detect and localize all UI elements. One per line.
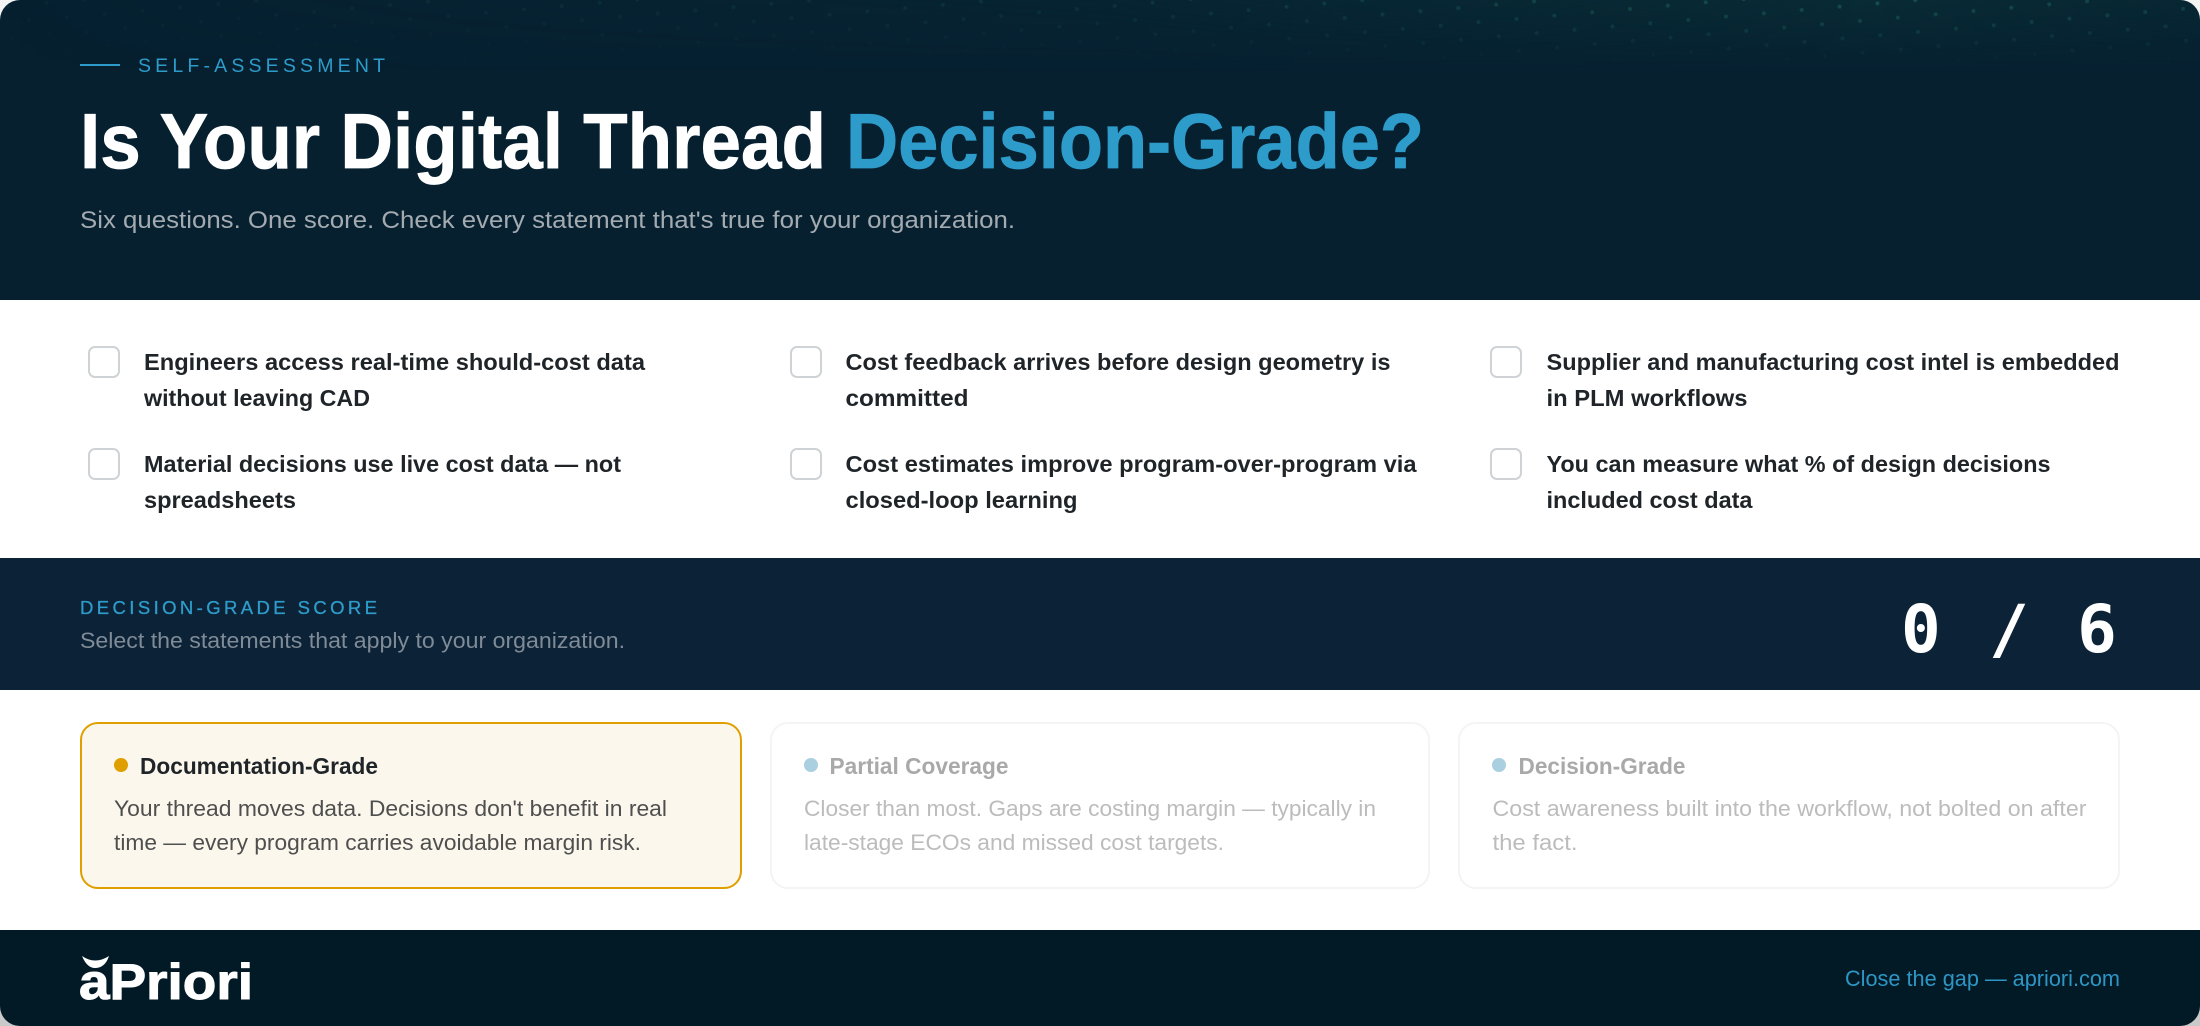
status dot xyxy=(804,758,818,772)
card body: Closer than most. Gaps are costing margin — typically in xyxy=(804,796,1376,821)
checklist item 5 xyxy=(1491,347,2120,411)
card body xyxy=(114,796,667,855)
checklist item 5: in PLM workflows xyxy=(1546,385,1748,411)
card body: the fact. xyxy=(1492,830,1578,855)
card body: time — every program carries avoidable margin risk. xyxy=(114,830,641,855)
checklist item 1: Engineers access real-time should-cost data xyxy=(144,349,645,375)
checklist item 3 xyxy=(791,347,1390,411)
checklist item 4: closed-loop learning xyxy=(846,487,1078,513)
panel: score bar xyxy=(0,558,2200,690)
card body xyxy=(804,796,1376,855)
status dot xyxy=(114,758,128,772)
panel: header xyxy=(0,0,2200,300)
title xyxy=(84,111,1420,185)
checklist item 3: Cost feedback arrives before design geometry is xyxy=(846,349,1390,375)
checklist item 3: committed xyxy=(846,385,968,411)
card: documentation-grade xyxy=(81,723,741,888)
score value: 0 / 6 xyxy=(1901,591,2121,668)
card title: Documentation-Grade xyxy=(140,753,378,779)
checklist item 4 xyxy=(791,449,1417,513)
panel: checklist xyxy=(0,300,2200,558)
panel: footer xyxy=(0,930,2200,1026)
card: decision-grade xyxy=(1459,723,2119,888)
card title: Partial Coverage xyxy=(830,753,1008,779)
checklist item 2: spreadsheets xyxy=(144,487,296,513)
card body: late-stage ECOs and missed cost targets. xyxy=(804,830,1224,855)
logo: aPriori: aPriori xyxy=(79,954,253,1010)
checklist item 2 xyxy=(89,449,621,513)
score label: DECISION-GRADE SCORE xyxy=(80,597,377,618)
checklist item 2: Material decisions use live cost data — not xyxy=(144,451,621,477)
card body: Your thread moves data. Decisions don't benefit in real xyxy=(114,796,667,821)
checklist item 5: Supplier and manufacturing cost intel is embedded xyxy=(1546,349,2120,375)
footer link: Close the gap — apriori.com xyxy=(1845,966,2120,991)
subtitle: Six questions. One score. Check every statement that's true for your organization. xyxy=(80,207,1015,234)
title: Decision-Grade? xyxy=(846,97,1424,185)
score hint: Select the statements that apply to your organization. xyxy=(80,628,625,653)
eyebrow label: SELF-ASSESSMENT xyxy=(138,55,385,77)
checklist item 6: You can measure what % of design decisions xyxy=(1546,451,2050,477)
panel: result tiers xyxy=(0,690,2200,930)
card: partial coverage xyxy=(771,723,1429,888)
card body xyxy=(1492,800,2086,850)
checklist item 1 xyxy=(89,347,645,411)
status dot xyxy=(1492,758,1506,772)
title: Is Your Digital Thread xyxy=(80,97,826,185)
checklist item 1: without leaving CAD xyxy=(143,385,370,411)
card body: Cost awareness built into the workflow, not bolted on after xyxy=(1492,796,2087,821)
eyebrow rule xyxy=(80,64,120,66)
checklist item 4: Cost estimates improve program-over-program via xyxy=(846,451,1417,477)
checklist item 6 xyxy=(1491,449,2050,513)
card title: Decision-Grade xyxy=(1518,753,1686,779)
checklist item 6: included cost data xyxy=(1546,487,1753,513)
